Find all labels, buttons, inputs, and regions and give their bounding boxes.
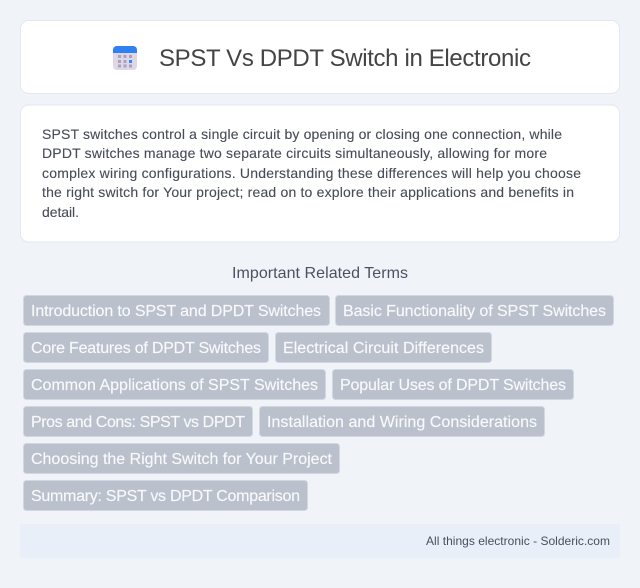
tag (24, 480, 308, 510)
tag (24, 406, 252, 436)
text block: description: SPST switches control a single circuit by opening or closing one connection, while (42, 126, 562, 142)
footer (20, 524, 620, 558)
text block: description: detail. (42, 204, 79, 220)
tag: Common Applications of SPST Switches (31, 377, 318, 394)
tag: Choosing the Right Switch for Your Project (31, 451, 333, 468)
icon: calendar (113, 46, 137, 70)
tag: Popular Uses of DPDT Switches (340, 377, 566, 394)
tag (24, 444, 340, 474)
tag (336, 296, 614, 326)
title: SPST Vs DPDT Switch in Electronic (159, 45, 531, 72)
tag: Installation and Wiring Considerations (267, 414, 537, 431)
tag: Basic Functionality of SPST Switches (343, 303, 606, 320)
tag (332, 370, 574, 400)
tag (24, 370, 326, 400)
text block: description (42, 126, 581, 220)
text block: description: DPDT switches manage two separate circuits simultaneously, allowing for more (42, 145, 547, 161)
tag (276, 332, 492, 362)
tag: Summary: SPST vs DPDT Comparison (31, 488, 300, 505)
heading: related terms: Important Related Terms (232, 265, 408, 282)
text block: description: complex wiring configurations. Understanding these differences will help you choose (42, 165, 581, 181)
text block: description: the right switch for Your project; read on to explore their applications and benefits in (42, 184, 574, 200)
tag: Introduction to SPST and DPDT Switches (31, 303, 321, 320)
tag (260, 406, 544, 436)
tag (24, 332, 268, 362)
tag: Pros and Cons: SPST vs DPDT (31, 414, 245, 431)
panel: header (20, 20, 620, 94)
tag (24, 296, 330, 326)
tag: Core Features of DPDT Switches (31, 340, 261, 357)
footer: All things electronic - Solderic.com (426, 534, 610, 548)
panel: related terms tags (24, 296, 614, 510)
tag: Electrical Circuit Differences (283, 340, 484, 357)
panel: description (20, 105, 620, 242)
